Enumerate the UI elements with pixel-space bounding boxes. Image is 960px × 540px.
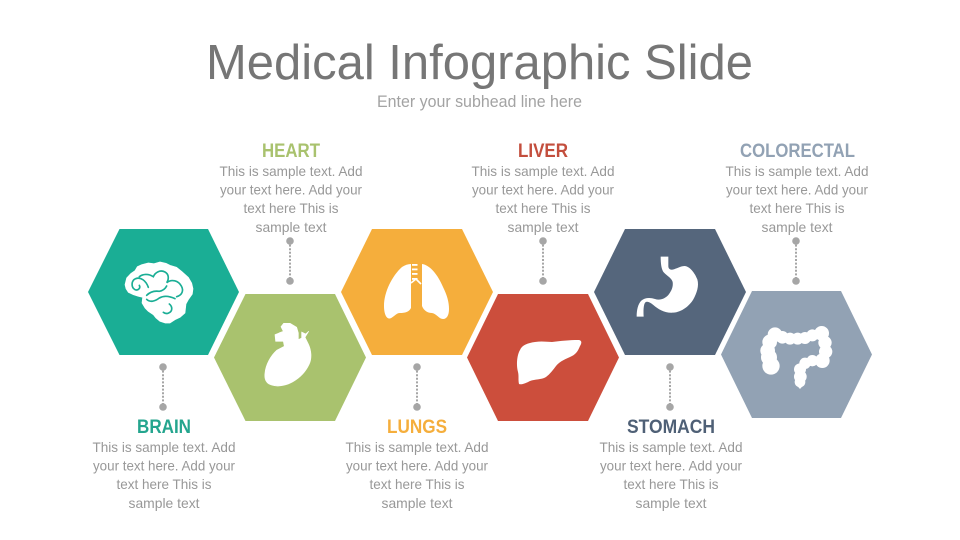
text block: heart: sample text [256,219,327,235]
text block: liver: This is sample text. Add [472,163,614,179]
heading: brain: BRAIN [137,416,191,438]
icon: heart [265,323,311,386]
connector: lungs [413,363,421,411]
text block: brain: your text here. Add your [93,458,235,474]
text block: stomach [600,439,742,511]
heading: stomach: STOMACH [627,416,715,438]
text block: liver: your text here. Add your [472,182,614,198]
text block: lungs [346,439,488,511]
text block: colorectal: text here This is [750,200,844,216]
text block: lungs: text here This is [370,476,464,492]
hexagon: liver [467,294,619,421]
panel: liver [467,140,619,421]
hexagon: stomach [594,229,746,355]
connector: heart [286,237,294,285]
icon: liver [517,340,581,384]
heading: lungs: LUNGS [387,416,447,438]
text block: stomach: text here This is [624,476,718,492]
connector: colorectal [792,237,800,285]
panel: lungs [341,229,493,511]
hexagon: brain [88,229,239,355]
text block: heart: This is sample text. Add [220,163,362,179]
icon: colorectal [760,326,832,389]
subhead: Enter your subhead line here [377,93,582,111]
hexagon: lungs [341,229,493,355]
text block: colorectal: your text here. Add your [726,182,868,198]
heading: colorectal: COLORECTAL [740,140,855,162]
panel: stomach [594,229,746,511]
panel: colorectal [721,140,872,418]
text block: colorectal [726,163,868,235]
title: Medical Infographic Slide [206,36,753,90]
text block: heart: your text here. Add your [220,182,362,198]
text block: colorectal: sample text [762,219,833,235]
heading: heart: HEART [262,140,320,162]
text block: stomach: This is sample text. Add [600,439,742,455]
text block: brain: sample text [128,495,200,511]
text block: liver: sample text [508,219,579,235]
icon: lungs [384,264,449,319]
panel: brain [88,229,239,511]
text block: liver [472,163,614,235]
text block: lungs: sample text [382,495,453,511]
hexagon: colorectal [721,291,872,418]
connector: liver [539,237,547,285]
icon: brain [125,262,193,323]
text block: colorectal: This is sample text. Add [726,163,868,179]
hexagon: heart [214,294,366,421]
text block: liver: text here This is [496,200,590,216]
text block: brain [92,439,236,511]
connector: brain [159,363,167,411]
connector: stomach [666,363,674,411]
text block: heart: text here This is [244,200,338,216]
text block: brain: This is sample text. Add [92,439,236,455]
text block: brain: text here This is [116,476,212,492]
text block: stomach: your text here. Add your [600,458,742,474]
text block: stomach: sample text [636,495,707,511]
heading: liver: LIVER [518,140,568,162]
text block: lungs: This is sample text. Add [346,439,488,455]
icon: stomach [637,257,698,317]
text block: heart [220,163,362,235]
panel: heart [214,140,366,421]
text block: lungs: your text here. Add your [346,458,488,474]
